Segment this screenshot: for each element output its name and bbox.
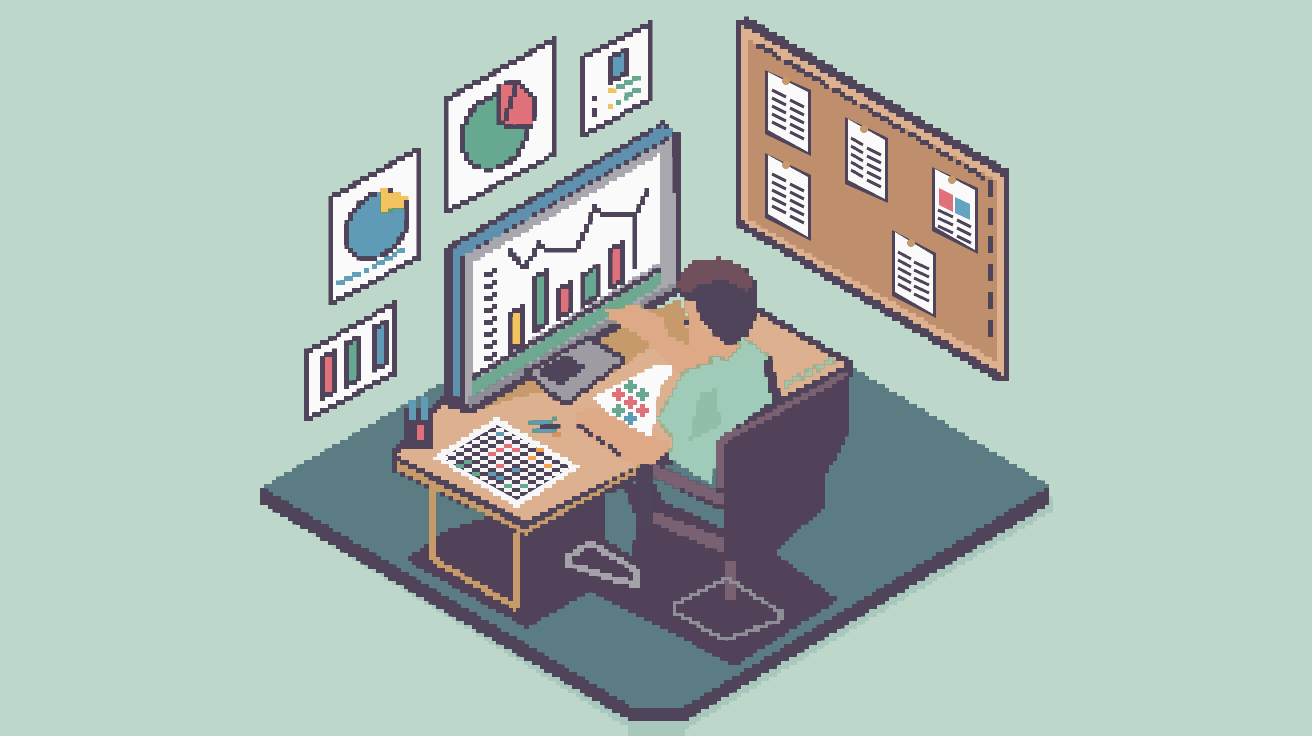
screen chart bbox=[472, 152, 662, 378]
monitor stand bbox=[525, 338, 625, 405]
chair back and seat bbox=[637, 372, 850, 600]
paper with colour squares bbox=[590, 363, 677, 437]
floor platform bbox=[262, 368, 1050, 720]
teal dashes on desk bbox=[784, 358, 836, 386]
chair base outline bbox=[674, 578, 780, 640]
floor shadow bbox=[262, 495, 1052, 736]
raised arm bbox=[605, 300, 712, 372]
wall chart: green and red pie bbox=[445, 40, 553, 213]
hair bbox=[676, 258, 757, 345]
checker grid with coloured cells bbox=[442, 425, 571, 500]
note 2 bbox=[845, 117, 888, 203]
head skin bbox=[683, 295, 742, 360]
pen cup bbox=[405, 396, 432, 448]
shoe bbox=[570, 543, 636, 584]
wall chart: mini bar and legend bbox=[583, 24, 649, 136]
leg bbox=[603, 486, 637, 558]
desk and chair floor shadow bbox=[407, 480, 837, 665]
note 3 bbox=[765, 153, 811, 241]
torso bbox=[657, 337, 780, 487]
forearm and hand bbox=[575, 407, 670, 467]
note 1 bbox=[765, 70, 811, 156]
desk bbox=[393, 300, 852, 610]
wall chart: three bars bbox=[307, 303, 395, 420]
checkered sheet base bbox=[431, 416, 582, 509]
corkboard bbox=[738, 18, 1010, 380]
pens on desk bbox=[530, 420, 562, 437]
note 5 bbox=[892, 230, 936, 318]
note 4 with colour swatches bbox=[932, 167, 978, 254]
person bbox=[570, 258, 780, 584]
monitor bbox=[445, 122, 681, 414]
wall chart: blue and yellow pie bbox=[332, 148, 421, 303]
